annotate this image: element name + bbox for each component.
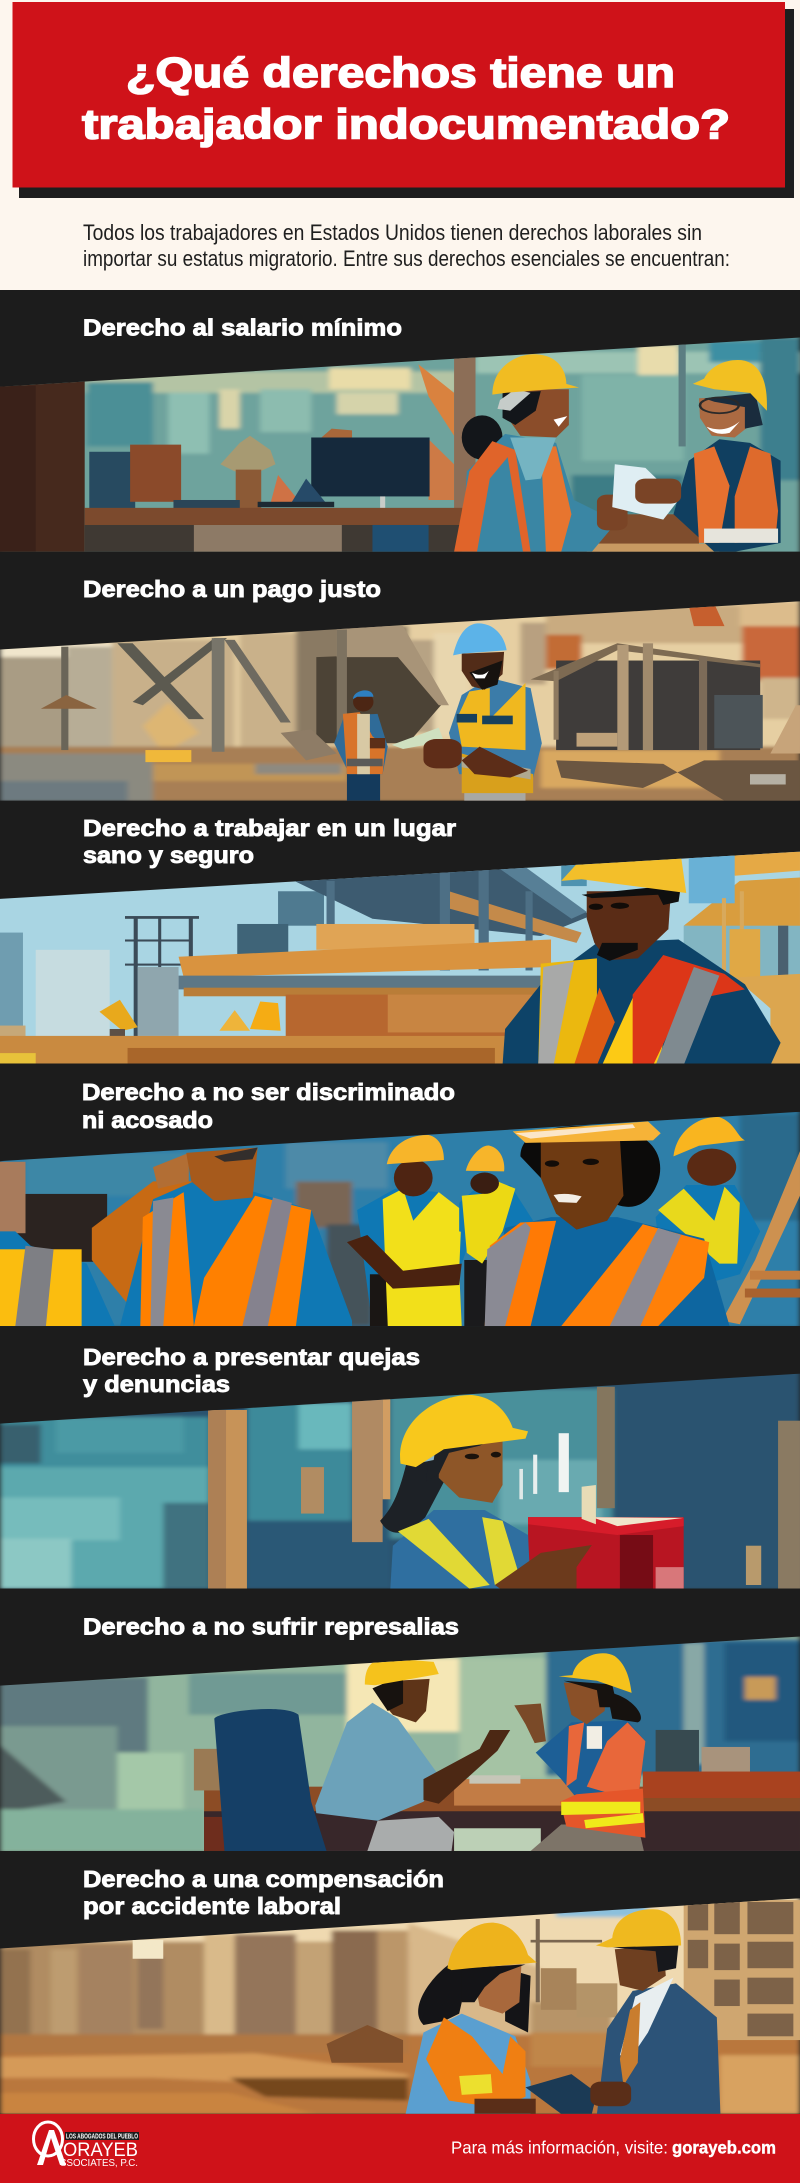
illustration: construction building and worker <box>0 850 800 1065</box>
logo: Gorayeb & Associates <box>34 2122 139 2169</box>
title banner: ¿Qué derechos tiene un <box>126 49 675 96</box>
panel: derecho a no ser discriminado ni acosado <box>0 1079 800 1328</box>
figure: worker with crossed arms <box>347 1135 469 1326</box>
heading: quejas y denuncias: Derecho a presentar quejas <box>83 1344 420 1370</box>
backdrop: office interior <box>0 1635 800 1853</box>
illustration: worker and lawyer at site <box>0 1896 800 2116</box>
figure: left cropped worker <box>0 1162 115 1326</box>
illustration: construction site payment <box>0 599 800 802</box>
figure: right worker with ladder <box>656 1117 800 1324</box>
illustration: office pay scene <box>0 338 800 552</box>
figure: woman in foreground <box>485 1121 730 1326</box>
panel: derecho a una compensación por accidente laboral <box>0 1866 800 2116</box>
heading: compensación por accidente: por accidente laboral <box>83 1893 341 1919</box>
panel: derecho a no sufrir represalias <box>0 1614 800 1853</box>
figure: woman in orange vest <box>514 1653 645 1851</box>
logo: Gorayeb & Associates: ORAYEB <box>63 2140 138 2161</box>
footer website text: gorayeb.com <box>672 2138 776 2158</box>
footer website text <box>451 2138 776 2158</box>
icon: red complaint box <box>528 1485 684 1589</box>
heading: lugar sano y seguro <box>83 815 456 868</box>
figure: right worker with glasses <box>635 360 781 552</box>
backdrop: office window <box>0 338 800 552</box>
footer website text: Para más información, visite: <box>451 2138 668 2158</box>
icon: office chair <box>214 1709 327 1851</box>
figure: small worker <box>334 690 388 802</box>
heading: quejas y denuncias: y denuncias <box>83 1371 230 1397</box>
title banner: trabajador indocumentado? <box>82 100 730 148</box>
heading: compensación por accidente <box>83 1866 444 1919</box>
icon: pay slip <box>612 464 679 520</box>
heading: quejas y denuncias <box>83 1344 420 1397</box>
icon: folder <box>526 2074 597 2114</box>
figure: large smiling worker <box>423 623 542 802</box>
illustration: office argument <box>0 1635 800 1853</box>
figure: older worker in orange vest <box>120 1147 352 1326</box>
figure: left worker with hard hat <box>454 354 628 552</box>
backdrop: site <box>0 599 800 802</box>
panel: derecho al salario mínimo <box>0 314 800 571</box>
heading: no ser discriminado <box>82 1079 455 1133</box>
panel: derecho a un pago justo <box>0 576 800 802</box>
backdrop: teal interior <box>0 1371 800 1590</box>
figure: background worker <box>459 1146 533 1326</box>
figure: man in suit <box>590 1909 720 2114</box>
panel: derecho a presentar quejas y denuncias <box>0 1344 800 1590</box>
figure: worker in hard hat and vest <box>503 857 781 1065</box>
icon: banknotes <box>392 728 444 749</box>
heading: compensación por accidente: Derecho a una compensación <box>83 1866 444 1892</box>
heading: salario mínimo: Derecho al salario mínimo <box>83 314 402 340</box>
heading: lugar sano y seguro: Derecho a trabajar en un lugar <box>83 815 456 841</box>
heading: no ser discriminado: Derecho a no ser discriminado <box>82 1079 455 1105</box>
intro text: Todos los trabajadores en Estados Unidos tienen derechos laborales sin <box>83 220 702 245</box>
figure: man in blue shirt <box>315 1658 510 1851</box>
heading: no sufrir represalias: Derecho a no sufrir represalias <box>83 1614 459 1640</box>
backdrop: site buildings and ground <box>0 1896 800 2116</box>
backdrop: blue site <box>0 1110 800 1328</box>
panel: derecho a trabajar en un lugar sano y seguro <box>0 815 800 1065</box>
illustration: worker at complaint box <box>0 1371 800 1590</box>
heading: pago justo: Derecho a un pago justo <box>83 576 381 602</box>
illustration: group of workers <box>0 1110 800 1328</box>
heading: no ser discriminado: ni acosado <box>82 1107 213 1133</box>
figure: woman with hard hat <box>380 1395 592 1589</box>
heading: lugar sano y seguro: sano y seguro <box>83 842 254 868</box>
intro text <box>83 220 730 271</box>
title banner <box>12 2 794 198</box>
logo: Gorayeb & Associates: LOS ABOGADOS DEL PUEBLO <box>66 2134 138 2140</box>
figure: woman in orange vest <box>406 1923 537 2114</box>
logo: Gorayeb & Associates: SSOCIATES, P.C. <box>60 2157 138 2169</box>
footer <box>0 2114 800 2183</box>
